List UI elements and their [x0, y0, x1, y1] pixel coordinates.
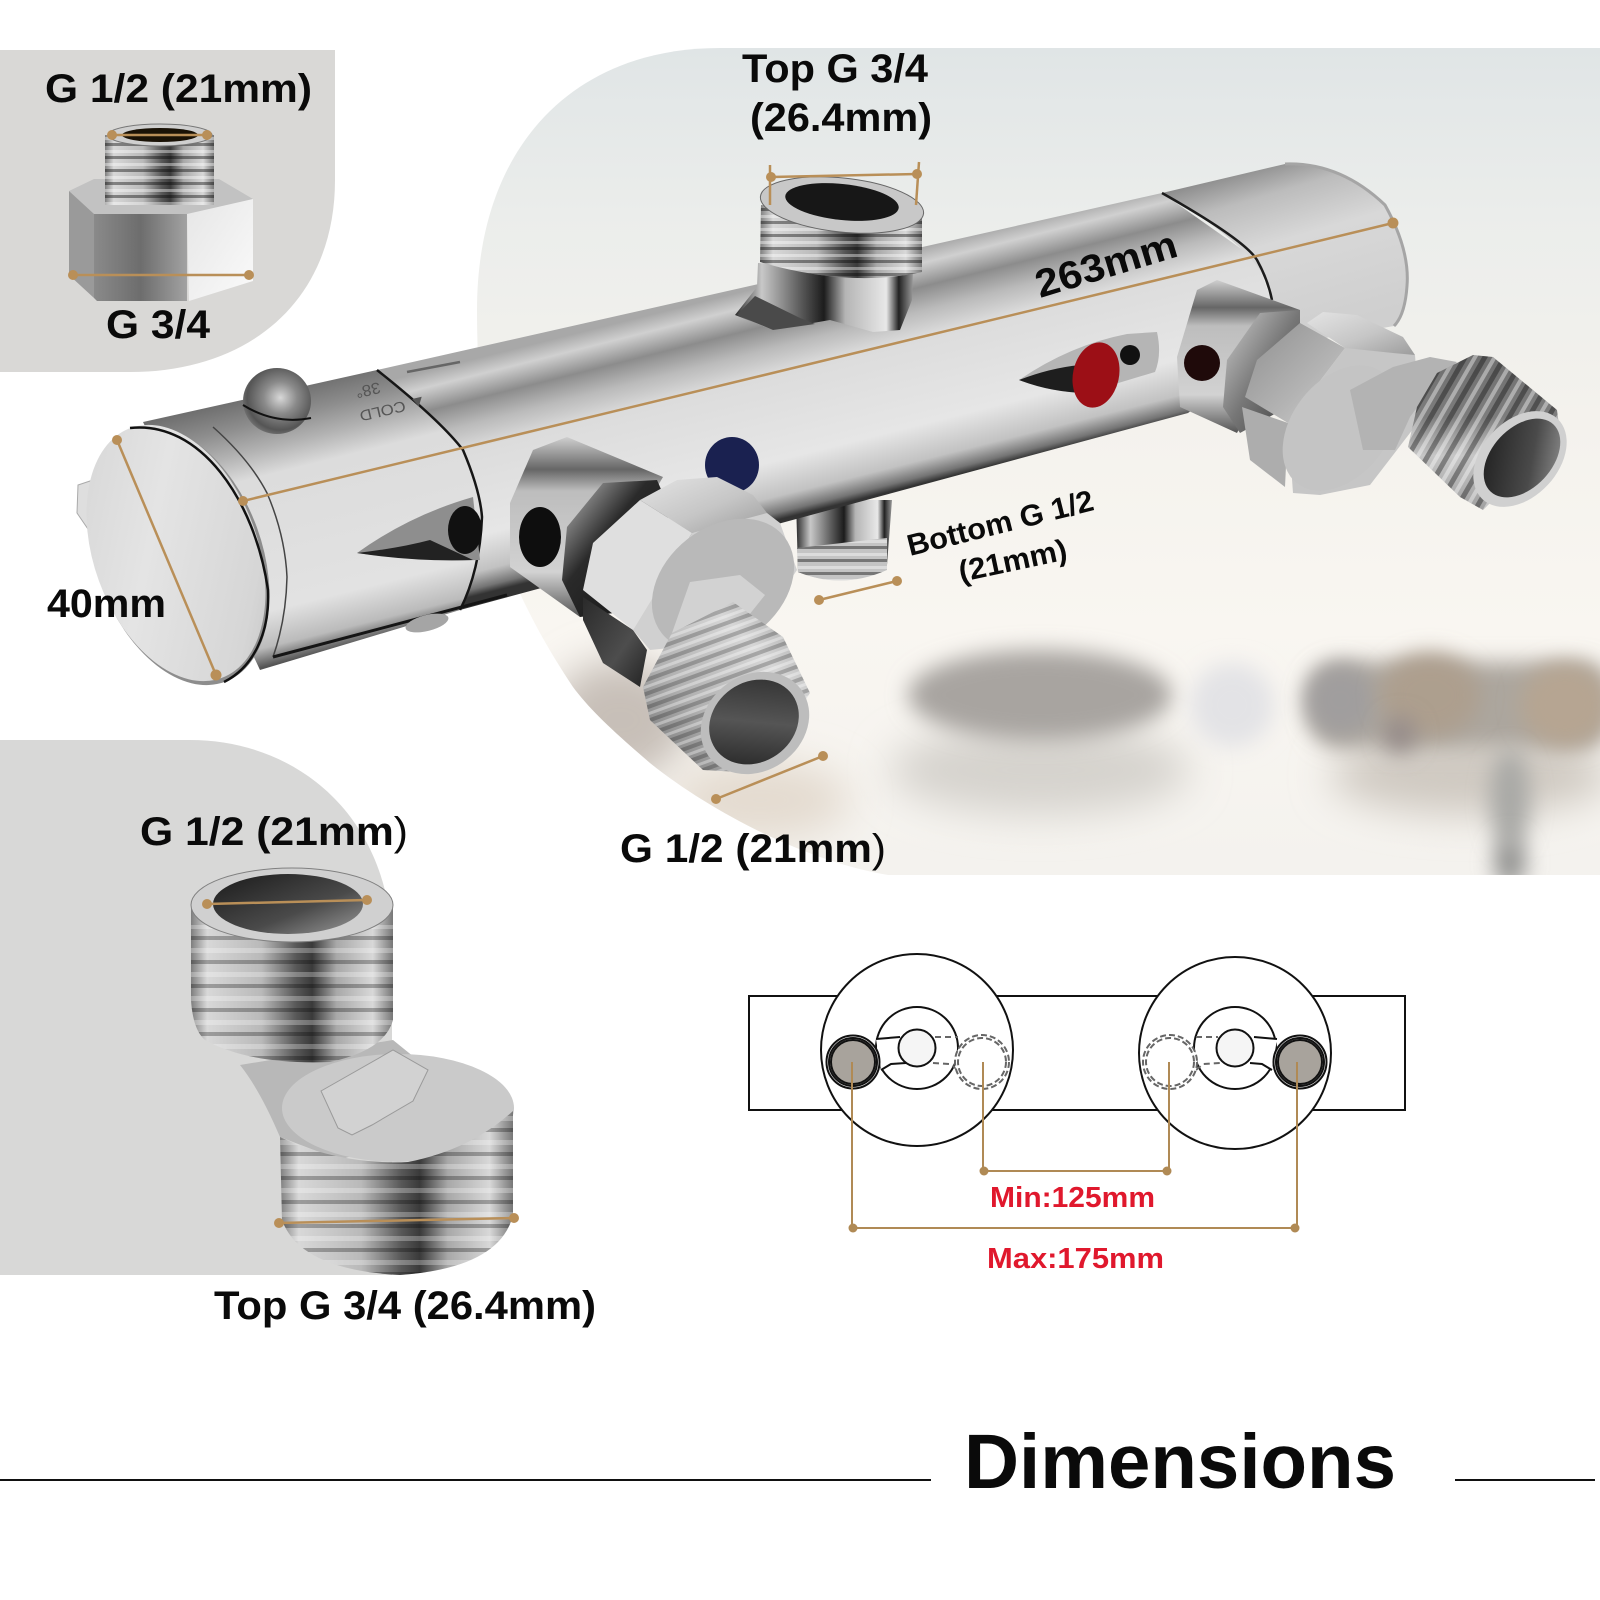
offset eccentric fitting	[191, 868, 514, 1275]
collar	[562, 480, 670, 617]
hex front face	[1245, 323, 1345, 423]
side slot left	[357, 497, 482, 560]
right dashed knob	[1143, 1035, 1197, 1089]
opening rim	[1455, 393, 1585, 525]
hex top face	[640, 477, 767, 533]
panel: blurred bathroom scene	[470, 48, 1600, 887]
panel: top-left adapter background	[0, 50, 335, 372]
hex left face	[69, 191, 94, 298]
measurement lines	[68, 130, 1398, 1228]
right end rim	[1285, 164, 1407, 326]
valve body cylinder	[143, 164, 1407, 670]
flare threads	[737, 296, 815, 330]
right ring line	[1162, 193, 1272, 300]
offset fitting bottom line	[279, 1218, 514, 1223]
label: offset fitting top size: G 1/2 (21mm )	[140, 810, 408, 854]
stem	[510, 437, 663, 617]
dark port	[1184, 345, 1220, 381]
rim	[191, 868, 393, 942]
base	[735, 263, 913, 332]
collar	[1223, 310, 1300, 433]
temperature marks: ▲ COLD	[358, 392, 428, 424]
hex center face	[94, 214, 187, 301]
red hot mark	[1067, 338, 1125, 412]
hex rim	[1288, 345, 1420, 495]
label: overall length: 263mm	[1030, 223, 1182, 307]
right elbow	[1177, 280, 1585, 525]
label: bottom outlet size: Bottom G 1/2	[904, 485, 1097, 563]
dark port	[519, 507, 561, 567]
bottom shadow line	[273, 595, 507, 657]
cast middle	[240, 1040, 450, 1160]
scale line	[407, 362, 460, 372]
hex rim	[633, 513, 797, 650]
hex adapter fitting	[69, 124, 253, 301]
left solid arm	[876, 1037, 900, 1070]
title: Dimensions: Dimensions	[964, 1419, 1396, 1505]
label: diameter: 40mm	[47, 582, 166, 626]
hex lit face	[583, 500, 692, 630]
cast lug	[672, 575, 765, 633]
stem	[1177, 280, 1300, 433]
left flange	[821, 954, 1013, 1146]
blue cold mark	[705, 437, 759, 493]
rough disc	[1259, 343, 1421, 513]
rim	[758, 170, 926, 240]
maximum spacing bracket	[848, 1062, 1300, 1232]
left dashed arm	[933, 1037, 958, 1070]
bottom outlet line	[819, 581, 897, 600]
right dashed arm	[1196, 1037, 1220, 1070]
end cap dark edge	[130, 427, 268, 682]
top inlet connector	[735, 170, 926, 332]
opening inside	[1469, 404, 1575, 512]
hex lower dark face	[583, 597, 647, 687]
cast lug	[1350, 357, 1457, 450]
panel: bottom-left adapter background	[0, 740, 392, 1275]
right flange	[1139, 957, 1331, 1149]
wall rectangle	[749, 996, 1405, 1110]
lug	[321, 1050, 428, 1135]
end cap rim	[55, 402, 303, 710]
hot mark slot	[1019, 332, 1159, 393]
rough disc	[626, 491, 820, 679]
opening	[213, 874, 363, 934]
rim	[108, 124, 212, 146]
hex right face	[187, 199, 253, 301]
opening	[783, 178, 901, 226]
left knob	[826, 1036, 880, 1088]
right end section	[1162, 164, 1407, 345]
minimum spacing bracket	[980, 1062, 1172, 1176]
hex top facet	[69, 179, 253, 218]
installation spacing diagram	[749, 954, 1405, 1275]
label: hex adapter bottom size: G 3/4	[106, 303, 211, 347]
label: top inlet millimetres: (26.4mm)	[750, 96, 932, 140]
top inlet line	[771, 174, 917, 177]
temperature marks: 38°	[354, 378, 382, 400]
diameter line	[117, 440, 216, 675]
hex adapter bottom line	[73, 274, 249, 276]
label: offset fitting bottom size: Top G 3/4 (26.4mm)	[214, 1284, 596, 1328]
bottom outlet stub	[796, 500, 892, 581]
right knob	[1274, 1036, 1326, 1088]
left ring line	[377, 370, 482, 610]
faucet: thermostatic mixer valve	[53, 164, 1585, 795]
label: elbow size: G 1/2 (21mm )	[620, 827, 886, 871]
label: bottom outlet millimetres: (21mm)	[956, 534, 1070, 589]
overall length line	[243, 223, 1393, 501]
opening rim	[681, 651, 829, 795]
threads	[105, 135, 214, 207]
label: top inlet size: Top G 3/4	[742, 47, 929, 91]
opening inside	[693, 662, 815, 782]
left dashed knob	[955, 1035, 1009, 1089]
elbow line	[716, 756, 823, 799]
hex adapter top line	[112, 134, 207, 136]
end cap tab	[77, 480, 93, 532]
label: hex adapter top size: G 1/2 (21mm)	[45, 67, 312, 111]
min label: Min:125mm	[990, 1182, 1155, 1214]
threaded tube	[1408, 355, 1560, 510]
middle section	[377, 193, 1285, 610]
underside bump	[404, 610, 450, 636]
hex top face	[1307, 312, 1415, 355]
threads	[760, 205, 922, 278]
opening	[122, 128, 198, 142]
max label: Max:175mm	[987, 1243, 1164, 1275]
lower threads	[280, 1111, 513, 1275]
cap ring line	[213, 427, 287, 657]
temperature knob	[243, 368, 311, 434]
left section	[143, 370, 482, 670]
hex lower face	[1242, 407, 1288, 487]
end cap	[53, 400, 299, 706]
threaded tube	[643, 602, 810, 773]
right solid arm	[1250, 1037, 1277, 1070]
offset fitting top line	[207, 900, 367, 904]
upper threads	[191, 905, 393, 1062]
temperature marks	[354, 378, 428, 424]
left elbow	[510, 437, 829, 795]
lower disc	[282, 1054, 514, 1162]
